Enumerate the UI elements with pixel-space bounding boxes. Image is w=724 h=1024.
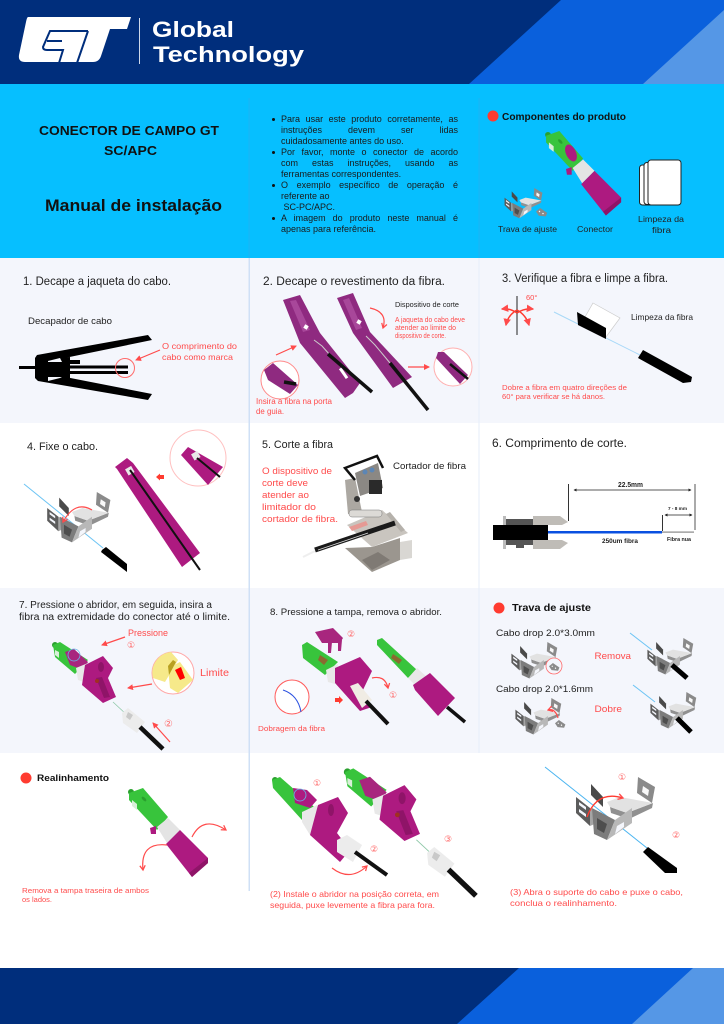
icon: clip fold before — [515, 698, 565, 735]
icon: connector rear cover — [128, 788, 208, 877]
panel: step 8: 8. Pressione a tampa, remova o abridor. — [270, 607, 442, 618]
text block: usage notes: Para usar este produto corretamente, as — [281, 114, 458, 124]
diagram: cut length: 7 - 8 mm — [668, 506, 687, 511]
icon: connector with opener and fibre — [344, 768, 476, 896]
panel: step 7: ② — [164, 719, 173, 730]
panel: step 5: atender ao — [262, 490, 309, 501]
panel: realignment step 3: (3) Abra o suporte do cabo e puxe o cabo, — [510, 887, 683, 897]
icon: magenta device — [115, 458, 200, 570]
icon: adjustment clip — [505, 188, 547, 218]
panel: realignment: os lados. — [22, 895, 52, 904]
panel: realignment: Remova a tampa traseira de ambos — [22, 886, 149, 895]
panel: step 7 — [19, 600, 230, 749]
panel: step 2: Dispositivo de corte — [395, 300, 459, 309]
text block: usage notes — [272, 114, 458, 234]
icon: connector with opener installed — [272, 777, 387, 875]
text block: usage notes: O exemplo específico de operação é — [281, 180, 458, 190]
callout: cutter limit detail — [434, 348, 472, 386]
panel: step 8: ① — [389, 691, 397, 701]
icon: large clip — [576, 777, 655, 840]
panel: product components — [488, 110, 685, 235]
panel: realignment step 2: ① — [313, 779, 321, 789]
diagram: cut length: 250um fibra — [602, 538, 638, 545]
panel: step 3: 3. Verifique a fibra e limpe a fibra. — [502, 273, 668, 285]
icon: fibre cleaver — [303, 456, 412, 572]
title block: CONECTOR DE CAMPO GT — [39, 123, 219, 138]
icon: stripping device left — [283, 295, 372, 398]
panel: step 8 — [258, 607, 465, 733]
panel: product components: Conector — [577, 225, 613, 234]
panel: step 1: cabo como marca — [162, 352, 233, 362]
panel: step 5 — [262, 439, 467, 572]
panel: realignment step 3: conclua o realinhamento. — [510, 898, 617, 908]
logo: GT Global Technology: Global — [152, 17, 234, 42]
panel: step 2 — [256, 276, 472, 416]
panel: step 2: atender ao limite do — [395, 325, 456, 332]
panel: step 7: Pressione — [128, 628, 168, 638]
panel: step 8: Dobragem da fibra — [258, 724, 326, 733]
panel: step 8: ② — [347, 630, 355, 640]
panel: realignment step 3: ② — [672, 831, 680, 841]
panel: step 2: dispositivo de corte. — [395, 333, 446, 340]
panel: adjustment clip — [494, 602, 696, 735]
text block: usage notes: com estas instruções, usando as — [281, 158, 458, 168]
callout: limit detail — [152, 652, 194, 694]
panel: realignment step 2 — [270, 768, 476, 910]
panel: step 6 — [492, 438, 696, 549]
diagram: cut length: Fibra nua — [667, 537, 691, 543]
logo: GT Global Technology — [19, 17, 305, 67]
panel: realignment step 2: ③ — [444, 835, 452, 845]
text block: usage notes: A imagem do produto neste manual é — [281, 213, 458, 223]
icon: stripping device right — [337, 293, 428, 410]
panel: adjustment clip: Dobre — [594, 704, 622, 715]
panel: step 7: fibra na extremidade do conector até o limite. — [19, 612, 230, 623]
panel: realignment step 3 — [510, 767, 683, 908]
panel: step 5: limitador do — [262, 502, 316, 513]
text block: usage notes: cuidadosamente antes do uso. — [281, 136, 404, 146]
icon: fibre and cleaning wipe — [554, 303, 692, 383]
panel: step 2: Insira a fibra na porta — [256, 397, 333, 406]
panel: product components: Componentes do produto — [502, 112, 626, 123]
callout: cable seat detail — [170, 430, 226, 486]
icon: finished connector — [377, 638, 465, 722]
panel: adjustment clip: Remova — [594, 651, 632, 662]
icon: cleaning cards — [640, 160, 681, 205]
panel: step 5: 5. Corte a fibra — [262, 439, 334, 451]
panel: adjustment clip: Trava de ajuste — [512, 602, 591, 614]
panel: realignment step 2: seguida, puxe levemente a fibra para fora. — [270, 900, 435, 910]
panel: product components: Trava de ajuste — [498, 225, 558, 234]
panel: step 6: 6. Comprimento de corte. — [492, 438, 627, 450]
panel: step 1: Decapador de cabo — [28, 316, 112, 327]
icon: clip with cable — [47, 492, 127, 572]
panel: step 3 — [502, 273, 693, 401]
text block: usage notes: Por favor, monte o conector de acordo — [281, 147, 458, 157]
panel: product components: fibra — [652, 226, 672, 235]
panel: step 5: Cortador de fibra — [393, 461, 467, 472]
panel: product components: Limpeza da — [638, 215, 685, 224]
panel: step 5: O dispositivo de — [262, 466, 332, 477]
panel: step 3: Limpeza da fibra — [631, 312, 693, 322]
icon: connector with opener removed — [302, 642, 388, 724]
panel: step 1: O comprimento do — [162, 341, 237, 351]
panel: step 2: de guia. — [256, 407, 284, 416]
panel: realignment step 3: ① — [618, 773, 626, 783]
icon: 60 degree bend arrows: 60° — [526, 293, 537, 302]
panel: realignment — [20, 772, 226, 904]
panel: step 2: 2. Decape o revestimento da fibra. — [263, 276, 445, 288]
panel: step 7: ① — [127, 641, 135, 651]
panel: step 7: Limite — [200, 668, 229, 679]
panel: step 5: cortador de fibra. — [262, 514, 338, 525]
text block: usage notes: ferramentas correspondentes. — [281, 169, 401, 179]
header band — [0, 0, 724, 84]
icon: 60 degree bend arrows — [502, 293, 537, 335]
panel: step 1 — [19, 276, 237, 400]
title block: SC/APC — [104, 143, 158, 158]
panel: step 3: Dobre a fibra em quatro direções de — [502, 383, 627, 392]
diagram: cut length — [493, 482, 696, 549]
panel: step 1: 1. Decape a jaqueta do cabo. — [23, 276, 171, 288]
text block: usage notes: SC-PC/APC. — [284, 202, 335, 212]
footer band — [0, 968, 724, 1024]
panel: step 4 — [24, 430, 226, 572]
text block: usage notes: instruções devem ser lidas — [281, 125, 458, 135]
icon: cable stripper — [19, 335, 152, 400]
cyan intro band — [0, 84, 724, 258]
title block — [39, 123, 222, 215]
title block: Manual de instalação — [45, 196, 222, 215]
icon: connector — [545, 131, 621, 216]
panel: step 4: 4. Fixe o cabo. — [27, 441, 98, 453]
panel: realignment step 2: (2) Instale o abridor na posição correta, em — [270, 889, 439, 899]
icon: loose cap — [315, 628, 343, 653]
icon: clip remove after — [630, 633, 693, 678]
text block: usage notes: referente ao — [281, 191, 330, 201]
icon: connector with opener — [52, 642, 163, 749]
panel: realignment step 2: ② — [370, 845, 378, 855]
panel: step 7: 7. Pressione o abridor, em seguida, insira a — [19, 600, 212, 611]
panel: step 3: 60° para verificar se há danos. — [502, 392, 605, 401]
panel: adjustment clip: Cabo drop 2.0*1.6mm — [496, 684, 593, 695]
callout: guide port detail — [261, 361, 299, 399]
icon: fibre bend — [275, 680, 309, 714]
panel: step 5: corte deve — [262, 478, 308, 489]
panel: realignment: Realinhamento — [37, 773, 109, 784]
logo: GT Global Technology: Technology — [153, 42, 305, 67]
icon: clip fold after — [633, 685, 696, 732]
diagram: cut length: 22.5mm — [618, 482, 643, 489]
panel: step 2: A jaqueta do cabo deve — [395, 317, 465, 324]
panel: adjustment clip: Cabo drop 2.0*3.0mm — [496, 628, 595, 639]
text block: usage notes: apenas para referência. — [281, 224, 376, 234]
icon: clip remove before — [511, 642, 562, 679]
